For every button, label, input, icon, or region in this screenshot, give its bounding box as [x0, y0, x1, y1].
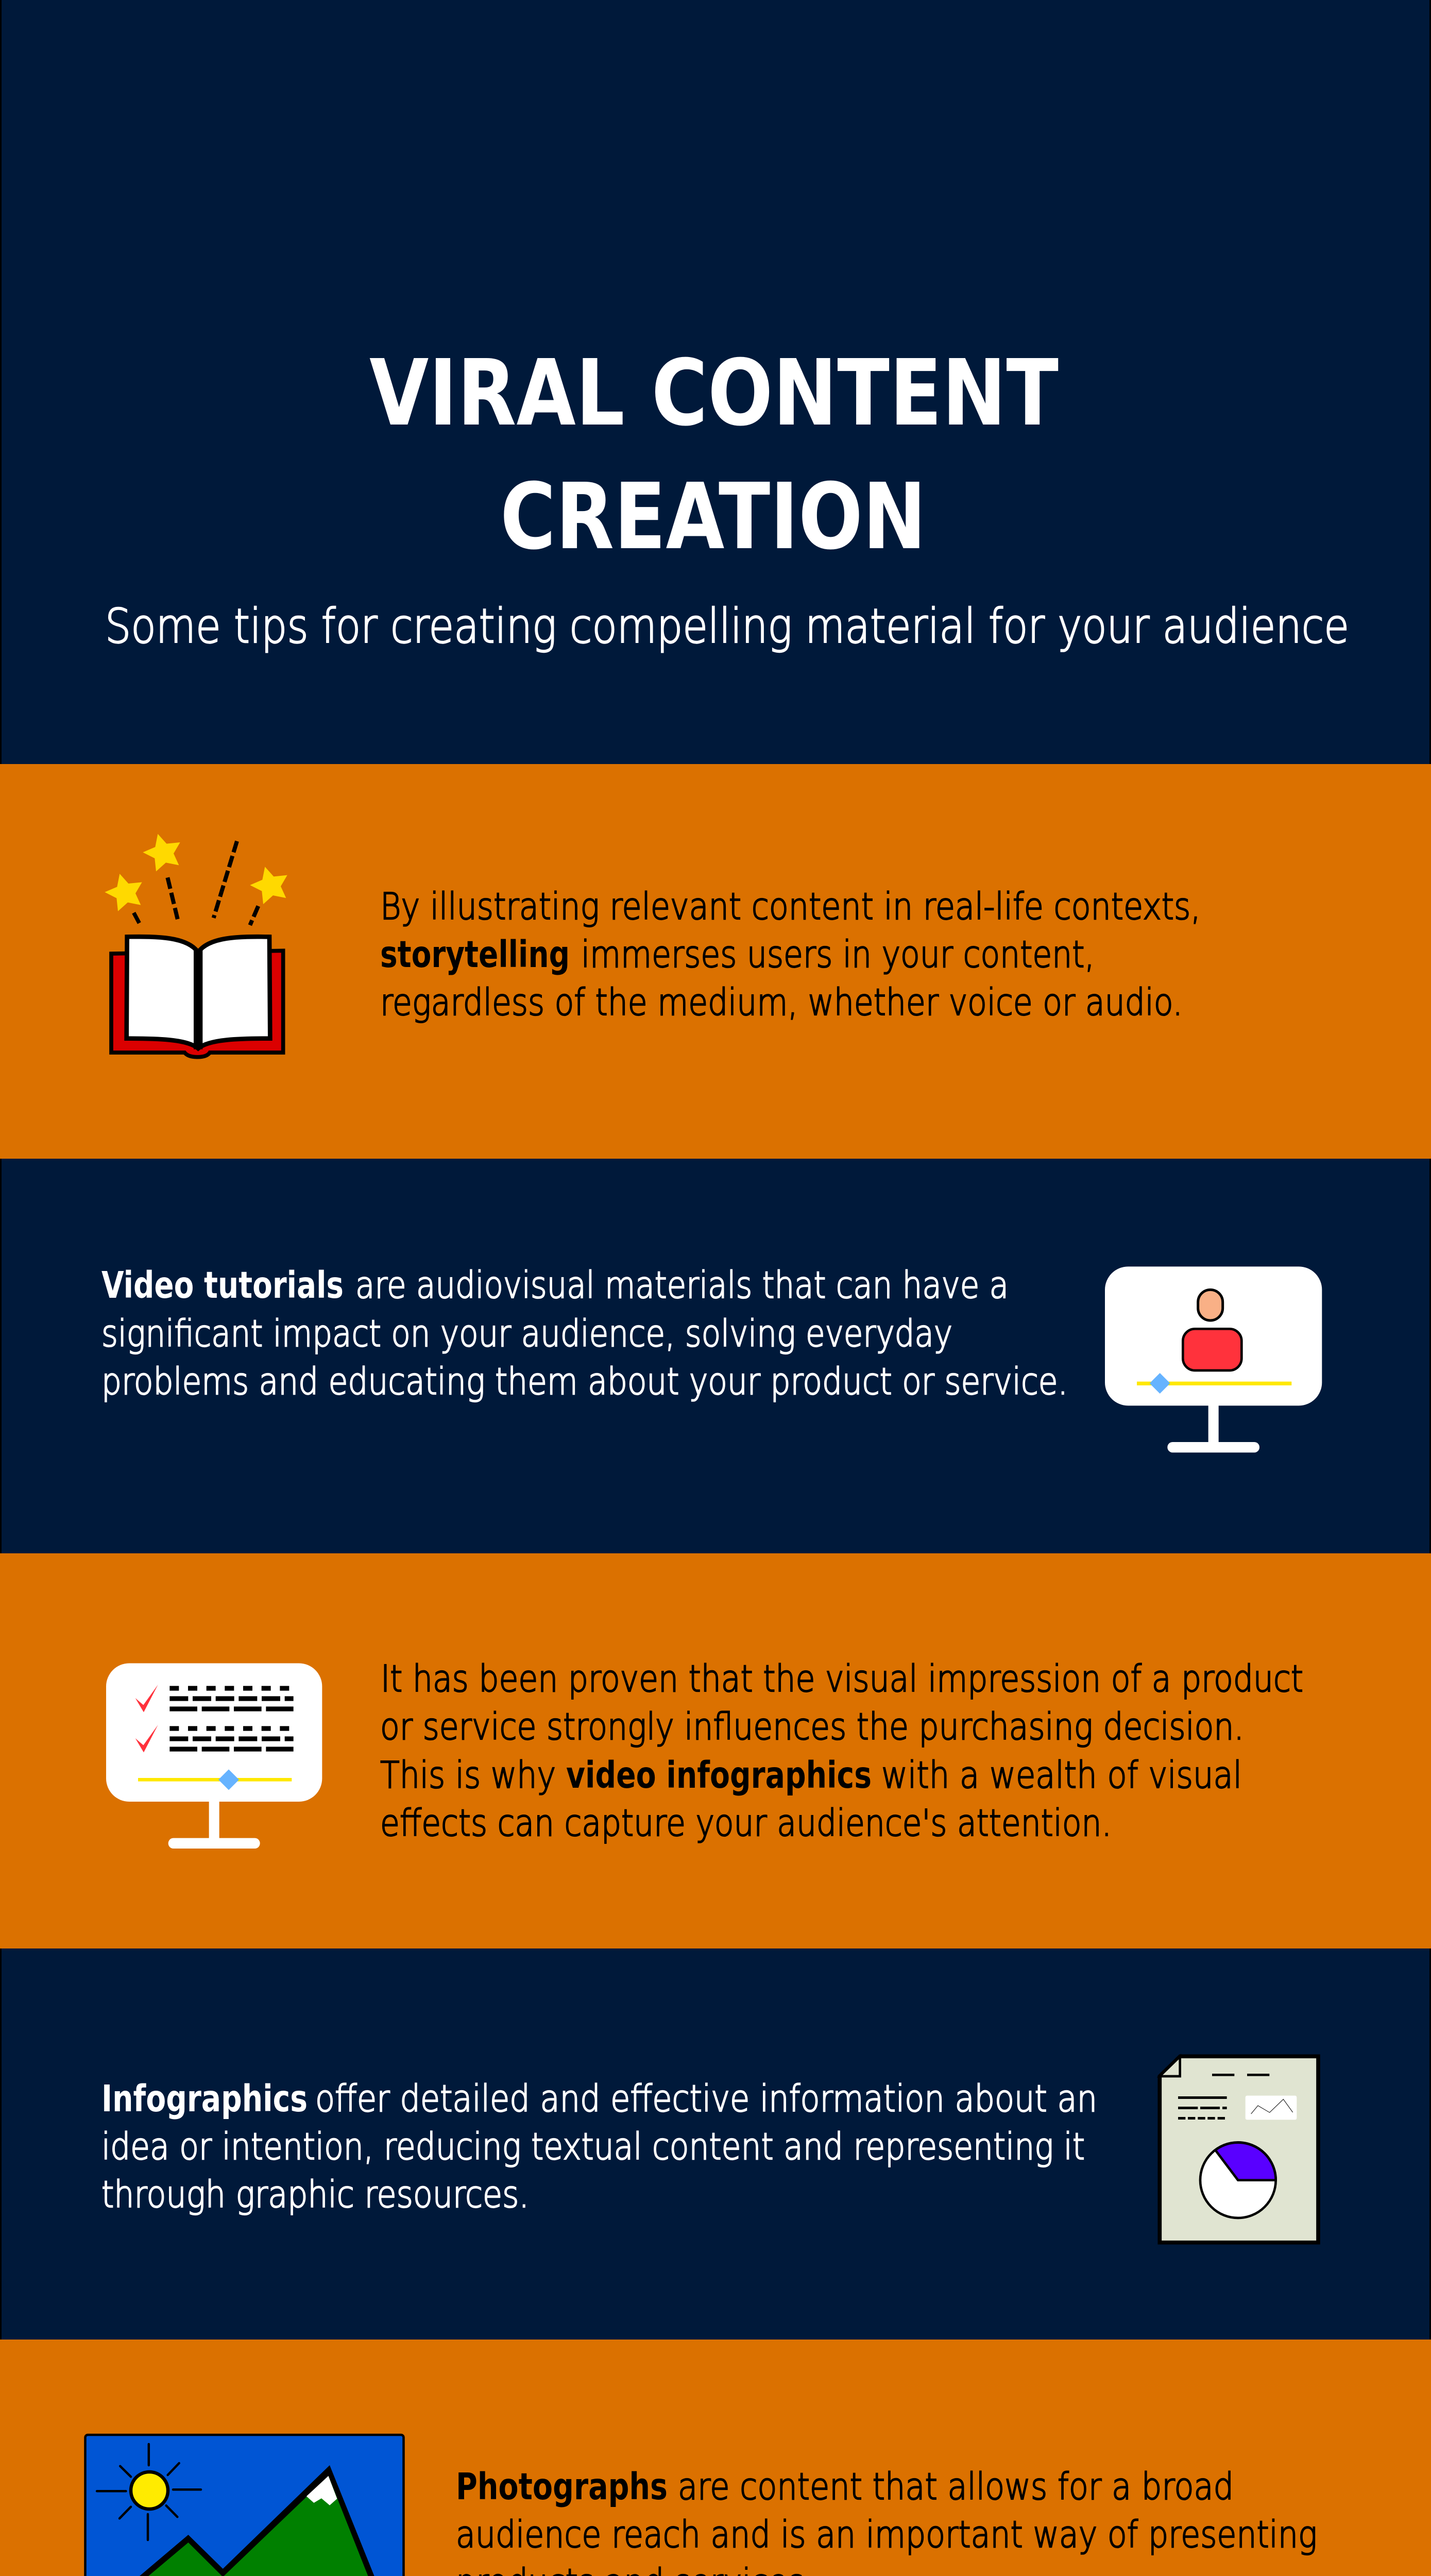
icon: document with charts [1160, 2056, 1318, 2243]
text: infographics: idea or intention, reducing textual content and representing it [101, 2125, 1085, 2168]
text: storytelling [380, 885, 1201, 1024]
panel: video tutorials [101, 1264, 1322, 1452]
text: video tutorials: problems and educating them about your product or service. [101, 1360, 1068, 1403]
text: infographics: offer detailed and effective information about an [315, 2077, 1097, 2120]
text: video tutorials: significant impact on your audience, solving everyday [101, 1312, 952, 1355]
title [369, 340, 1059, 570]
text: photographs: audience reach and is an important way of presenting [456, 2513, 1317, 2556]
text: infographics [101, 2077, 1097, 2216]
text: infographics: through graphic resources. [101, 2173, 529, 2216]
icon: monitor with checklist [106, 1663, 322, 1849]
icon: monitor with presenter [1105, 1266, 1322, 1452]
text: storytelling: regardless of the medium, whether voice or audio. [380, 981, 1183, 1024]
text: video infographics: This is why [380, 1754, 556, 1797]
text: video infographics: effects can capture your audience's attention. [380, 1802, 1112, 1844]
text: photographs: Photographs [456, 2465, 668, 2508]
text: video infographics [380, 1657, 1303, 1844]
text: storytelling: immerses users in your content, [581, 933, 1095, 976]
title: CREATION [500, 464, 926, 570]
text: photographs [456, 2465, 1317, 2576]
panel: photographs [0, 2340, 1431, 2576]
panel: storytelling [0, 764, 1431, 1159]
icon: landscape photo [86, 2435, 404, 2576]
text: infographics: Infographics [101, 2077, 308, 2120]
icon: open book with stars [105, 834, 287, 1057]
text: video tutorials: are audiovisual materials that can have a [355, 1264, 1009, 1307]
text: video infographics: video infographics [566, 1754, 872, 1797]
text: video tutorials [101, 1264, 1068, 1403]
text: storytelling: By illustrating relevant content in real-life contexts, [380, 885, 1201, 928]
panel: infographics [101, 2056, 1318, 2243]
text: storytelling: storytelling [380, 933, 570, 976]
title: VIRAL CONTENT [369, 340, 1059, 446]
text: video tutorials: Video tutorials [101, 1264, 344, 1307]
panel: video infographics [0, 1553, 1431, 1948]
text: video infographics: It has been proven that the visual impression of a product [381, 1657, 1303, 1700]
text: video infographics: or service strongly influences the purchasing decision. [380, 1705, 1244, 1748]
text: photographs: are content that allows for a broad [678, 2465, 1234, 2508]
text: video infographics: with a wealth of visual [881, 1754, 1242, 1797]
